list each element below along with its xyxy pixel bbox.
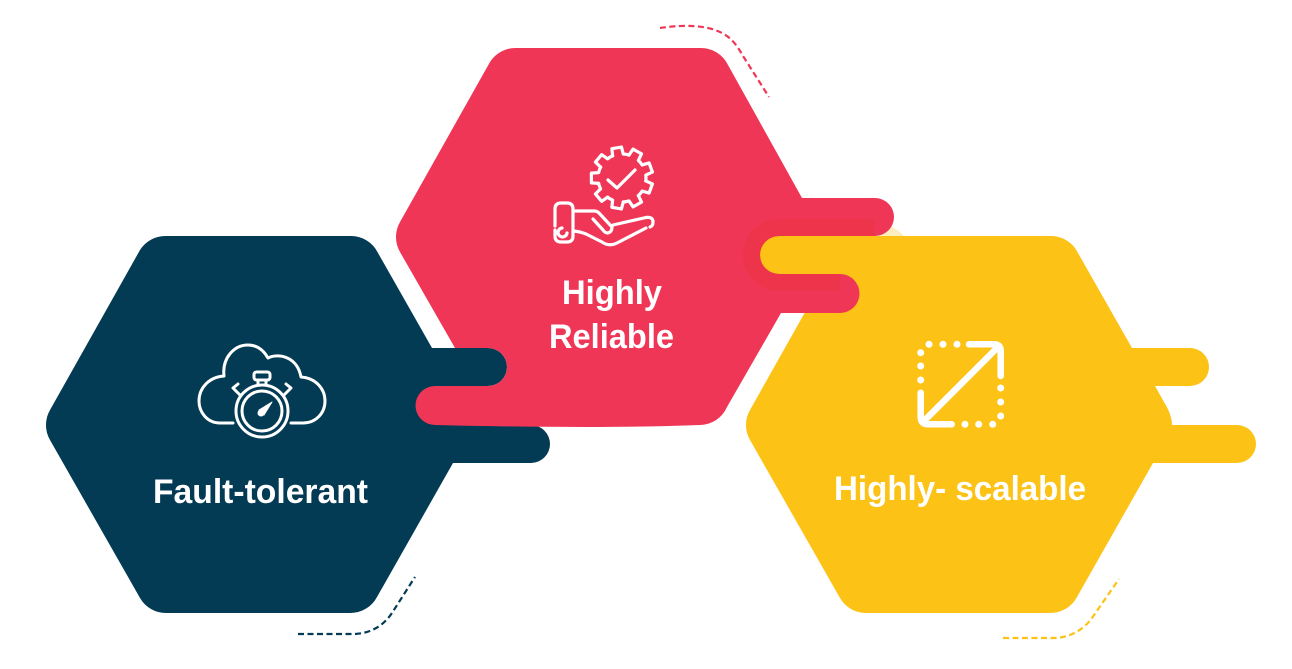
title: Fault-tolerant: Fault-tolerant [153, 473, 368, 511]
icon: scale arrows [917, 341, 1004, 428]
icon: gear [591, 146, 654, 210]
panel: yellow hexagon [746, 224, 1256, 613]
dashed accent: yellow [1003, 579, 1119, 638]
title: Highly Reliable: Reliable [549, 318, 674, 356]
title: Highly- scalable: Highly- scalable [834, 470, 1086, 508]
title: Highly Reliable [549, 274, 674, 356]
icon: hand [555, 203, 653, 245]
panel: red hexagon [396, 48, 894, 427]
dashed accent: navy [298, 577, 415, 634]
icon: gear and hand [555, 146, 654, 245]
panel: navy hexagon [46, 236, 550, 613]
title: Highly Reliable: Highly [562, 274, 662, 312]
dashed accent: red [660, 26, 769, 97]
icon: cloud with stopwatch [199, 345, 325, 437]
icon: check mark [608, 170, 635, 188]
